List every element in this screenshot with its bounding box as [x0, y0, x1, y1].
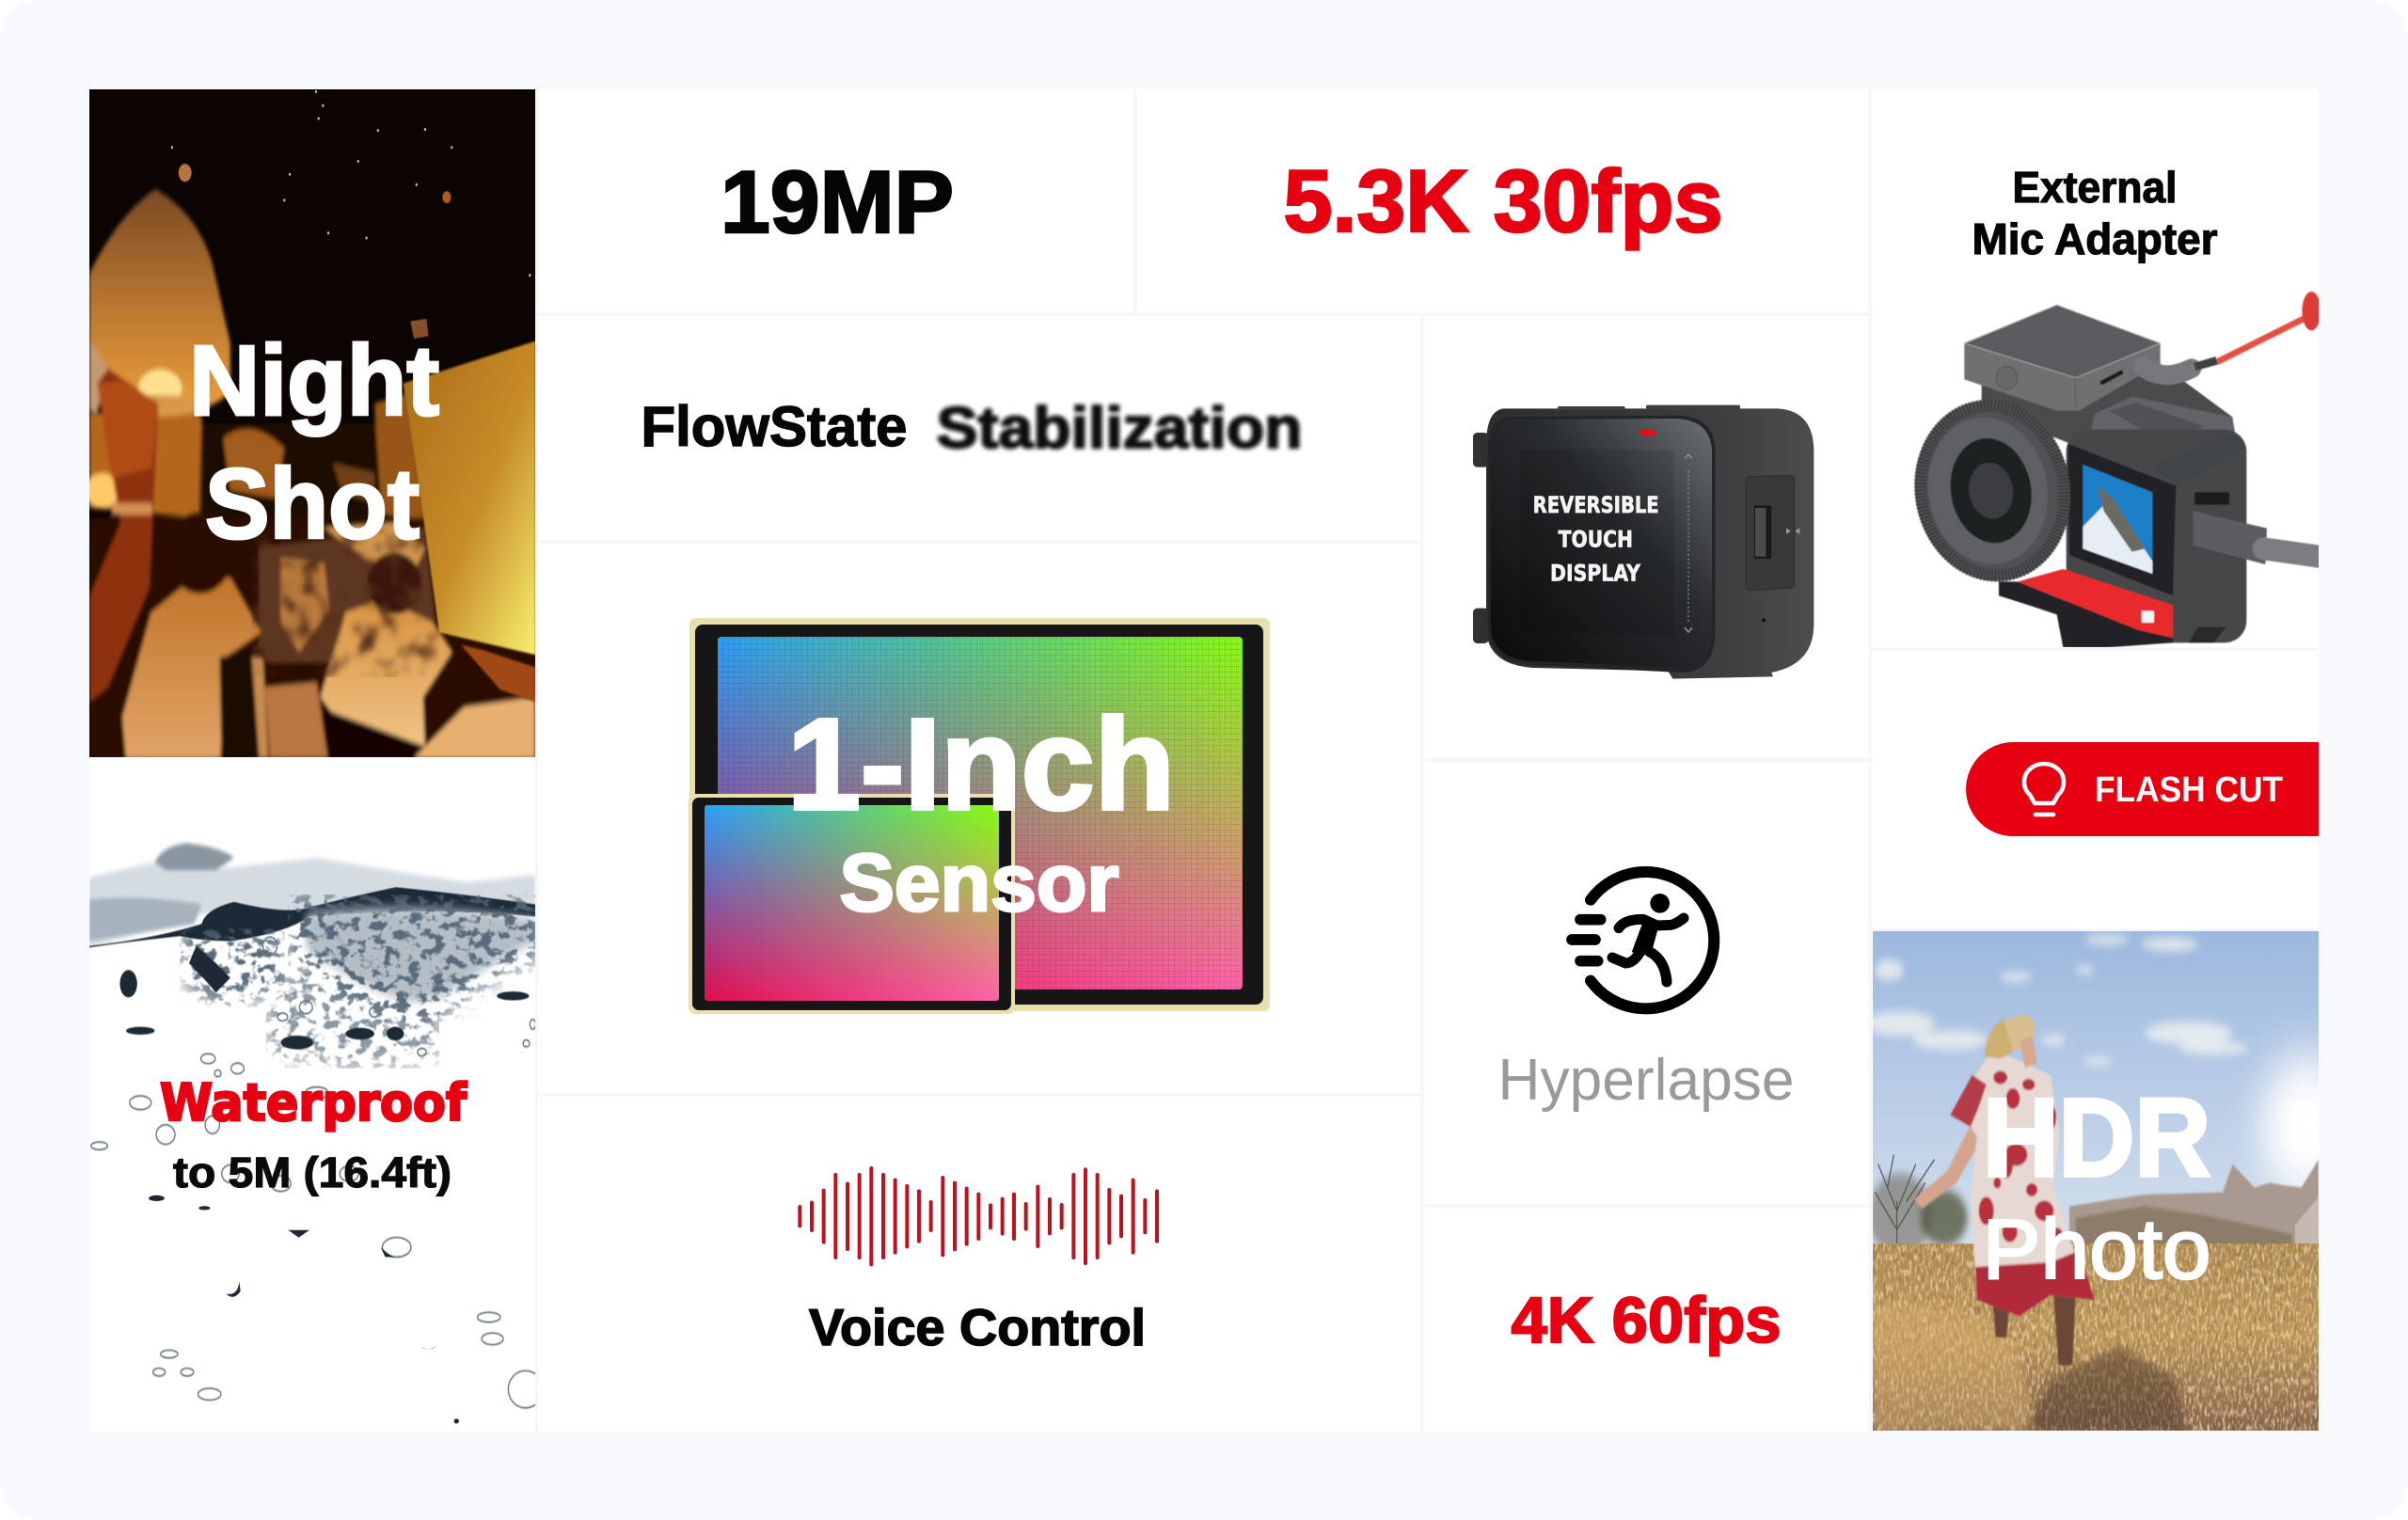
- panel: reversible touch display: [1473, 405, 1814, 679]
- panel: voice control: [800, 1168, 1157, 1356]
- heading: external mic adapter: Mic Adapter: [1972, 214, 2218, 263]
- label: flowstate: FlowState: [642, 395, 907, 458]
- large sensor graphic: [689, 618, 1270, 1011]
- camera buttons and clips: [1473, 405, 1740, 643]
- panel: 19MP: 19MP: [721, 152, 954, 251]
- heading: night shot: [189, 325, 439, 560]
- heading: waterproof: Waterproof: [160, 1073, 467, 1132]
- label: voice control: Voice Control: [809, 1298, 1146, 1356]
- panel: night shot: [85, 89, 535, 762]
- subheading: depth rating: to 5M (16.4ft): [173, 1148, 452, 1196]
- photo: woman in golden field: [1865, 931, 2354, 1431]
- screen text: REVERSIBLE: [1533, 492, 1659, 518]
- panel: HDR photo: [1865, 931, 2354, 1431]
- small sensor graphic: [689, 794, 1015, 1014]
- side door: [1746, 475, 1799, 622]
- panel: hyperlapse: [1497, 872, 1795, 1113]
- heading: sensor: Sensor: [839, 838, 1119, 928]
- icon: runner: [1572, 872, 1714, 1008]
- panel: flowstate stabilization: [642, 395, 1302, 461]
- panel: flash cut: [1966, 742, 2319, 836]
- icon: light bulb: [2024, 764, 2064, 815]
- panel: waterproof: [89, 843, 543, 1423]
- heading: external mic adapter: [1972, 163, 2218, 263]
- screen text: DISPLAY: [1550, 560, 1641, 586]
- panel: 5.3K 30fps: 5.3K 30fps: [1283, 151, 1723, 250]
- heading: 1-inch: 1-Inch: [787, 692, 1175, 837]
- label: hyperlapse: Hyperlapse: [1497, 1048, 1795, 1113]
- photo: water splash and bubbles: [89, 843, 543, 1423]
- screen text: TOUCH: [1559, 527, 1633, 553]
- pill button: [1966, 742, 2319, 836]
- panel: 1-inch sensor: [689, 618, 1270, 1014]
- camera with mic adapter: [1900, 292, 2321, 647]
- touch screen: [1488, 416, 1715, 673]
- heading: night shot: Night: [189, 325, 439, 436]
- screen text: [1533, 492, 1659, 586]
- icon: waveform: [800, 1168, 1157, 1264]
- photo: sky lanterns crowd: [85, 89, 535, 762]
- panel: 4K 60fps: 4K 60fps: [1511, 1284, 1782, 1356]
- label: blurred stabilization: Stabilization: [937, 396, 1302, 461]
- panel: external mic adapter: [1900, 163, 2321, 647]
- heading: external mic adapter: External: [2013, 163, 2177, 212]
- label: flash cut: FLASH CUT: [2095, 770, 2283, 810]
- heading: HDR: HDR: [1983, 1076, 2210, 1200]
- heading: photo: Photo: [1983, 1203, 2210, 1297]
- camera body: [1486, 408, 1814, 679]
- heading: night shot: Shot: [205, 449, 420, 560]
